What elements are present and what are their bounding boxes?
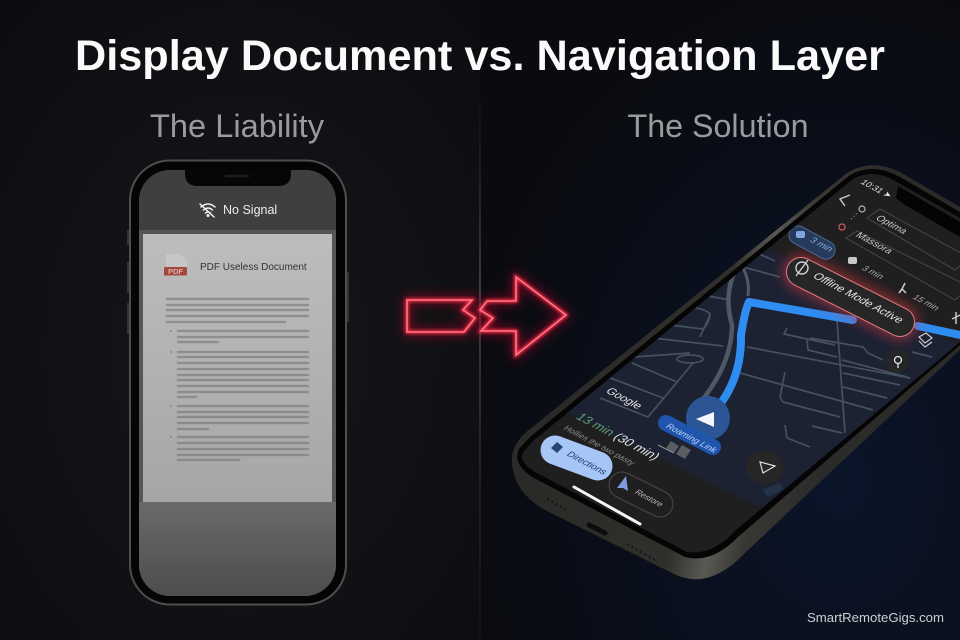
broken neon arrow [407,277,566,355]
recenter button [746,450,784,484]
heading: The Liability: The Liability [150,108,324,144]
status header [139,170,336,230]
main gray road [702,275,736,397]
bezel [517,169,960,558]
document heading: PDF Useless Document [200,262,307,273]
map streets [600,253,932,447]
input: origin [867,209,960,270]
route dots [851,213,857,219]
notch [896,186,960,237]
restore button: Restore [632,488,667,508]
input: origin text: Optima [873,214,910,236]
watermark: SmartRemoteGigs.com [807,610,944,625]
blue route [719,298,960,404]
blurred map pin [762,483,784,497]
origin marker [859,206,865,212]
bullets [170,330,172,438]
back chevron [840,195,850,206]
speaker grilles and port [547,499,658,562]
secondary gray road [742,266,748,296]
restore button [617,476,667,508]
icon: PDF file: PDF [168,267,183,276]
route description: Hollies the two pasty [561,424,638,467]
heading: The Solution: The Solution [628,108,808,144]
center divider [480,100,481,640]
cycling icon [952,312,960,324]
position marker [658,396,730,459]
destination marker [839,224,845,230]
transit option [848,257,883,280]
offline mode pill [796,260,906,325]
icon: no wifi [200,204,215,217]
google logo: Google [603,386,645,411]
screen [139,170,336,596]
walking option [898,282,938,310]
lower screen fill [139,502,336,596]
right phone: navigation app [500,150,960,580]
chip: roaming link: Roaming Link [663,422,720,454]
left phone: static PDF document [127,160,349,604]
document page [143,234,332,502]
background: left panel [0,0,480,640]
directions button [551,442,610,477]
layers button [919,333,932,347]
phone body [512,165,960,579]
input: destination [846,231,960,300]
input: destination text: Massora [853,231,895,256]
app screen [522,174,960,552]
background: right panel [480,0,960,640]
map area [567,249,958,508]
icon: PDF file [164,254,187,276]
eta: 13 min (30 min) [573,410,664,462]
time label: 10:31 ➤ [858,178,895,200]
document text lines [166,299,309,460]
home indicator [574,487,640,524]
directions button: Directions [564,450,610,477]
title: Display Document vs. Navigation Layer [75,32,885,80]
speaker and camera [226,175,248,177]
screen base [522,174,960,552]
side buttons [127,230,349,334]
no signal label: No Signal [223,203,277,217]
phone frame [130,160,346,604]
chip: drive time: 3 min [807,236,836,254]
search button [885,349,909,373]
notch [185,170,291,186]
transit option: 3 min [859,264,887,281]
pill label: Offline Mode Active [810,271,906,325]
walking option: 15 min [910,293,942,312]
icon: offline [796,260,808,276]
chip: drive time [796,231,836,254]
